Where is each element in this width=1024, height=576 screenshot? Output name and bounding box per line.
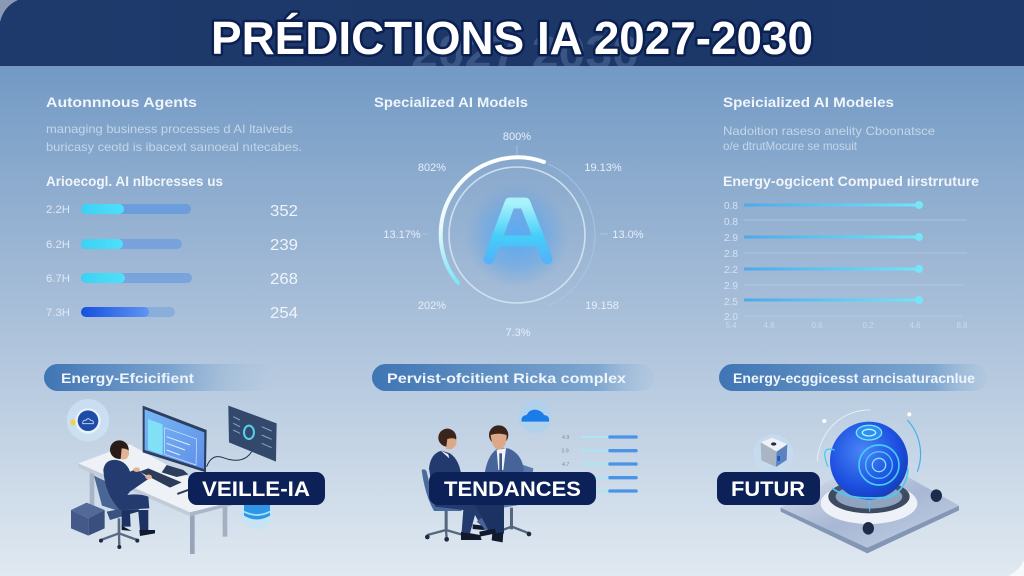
letter A (489, 203, 547, 259)
left chair (422, 469, 463, 542)
panel: energy-efficient compute (723, 94, 979, 330)
line chart: 4.8 (763, 321, 775, 330)
seated person (103, 440, 155, 536)
radial gauge (422, 145, 608, 306)
icon: cloud (518, 400, 552, 433)
icon: floating badge (67, 399, 109, 442)
tag: VEILLE-IA (188, 472, 325, 505)
line chart: 2.8 (724, 249, 738, 260)
chair (94, 476, 140, 549)
corner: bottom right (1008, 560, 1024, 576)
line chart: 2.9 (724, 233, 738, 244)
gauge labels: 800% (503, 131, 531, 143)
pill: complex (372, 364, 654, 391)
line chart (724, 201, 968, 330)
mini bar list: 4.7 (562, 462, 569, 468)
title: PRÉDICTIONS IA 2027-2030 (211, 12, 813, 64)
subheading: Arioecogl. AI nlbcresses us (46, 173, 223, 189)
heading: specialized AI models: Specialized AI Models (374, 94, 528, 110)
bar row 2 (46, 237, 298, 254)
line chart: 2.2 (724, 265, 738, 276)
gauge labels: 19.13% (584, 162, 622, 174)
bar row 1: 2.2H (46, 204, 70, 216)
description line 1: managing business processes d AI ltaiveds (46, 122, 293, 136)
right chair (493, 465, 533, 536)
bolts (863, 489, 942, 535)
panel: specialized models (374, 94, 644, 339)
heading: autonomous agents: Autonnnous Agents (46, 94, 197, 110)
description line 2: buricasy ceotd is ibacext saınoeal nıtecabes. (46, 140, 302, 154)
line chart: 8.8 (956, 321, 968, 330)
illustration: two people meeting (422, 400, 638, 542)
metal plate (781, 477, 959, 553)
line chart: 0.8 (724, 217, 738, 228)
bar row 3 (46, 271, 298, 288)
bar row 4: 7.3H (46, 307, 70, 319)
description line 2: o/e dtrutMocure se mosuit (723, 139, 858, 153)
mini bar list: 4.9 (562, 435, 569, 441)
bar row 3: 268 (270, 271, 298, 288)
bar row 1 (46, 203, 298, 220)
bar row 4: 254 (270, 305, 298, 322)
desk (78, 444, 233, 554)
gauge labels (383, 131, 644, 339)
storage box (71, 503, 105, 536)
bar row 4 (46, 305, 298, 322)
line chart: 5.4 (725, 321, 737, 330)
pill: complex: Pervist-ofcitient Ricka complex (387, 370, 626, 386)
gauge labels: 19.158 (585, 300, 619, 312)
tag: FUTUR (717, 472, 820, 505)
main monitor (143, 406, 207, 477)
socket ring (821, 480, 917, 524)
line chart: 0.6 (811, 321, 823, 330)
line chart: 2.0 (724, 312, 738, 323)
bar row 2: 6.2H (46, 239, 70, 251)
corner: top left (0, 0, 18, 22)
panel: autonomous agents (46, 94, 302, 322)
line chart: 2.9 (724, 281, 738, 292)
tag: TENDANCES: TENDANCES (444, 477, 581, 501)
right person (475, 425, 524, 542)
line chart: 0.8 (724, 201, 738, 212)
tag: VEILLE-IA: VEILLE-IA (202, 477, 310, 501)
pill: architecture: Energy-ecggicesst arncisaturacnlue (733, 370, 975, 386)
heading: Speicialized AI Modeles (723, 94, 894, 110)
ghost year behind title: 2027 2030 (411, 26, 639, 78)
second monitor (228, 406, 277, 462)
mini bar list (561, 435, 638, 493)
tag: FUTUR: FUTUR (731, 477, 805, 501)
gauge labels: 802% (418, 162, 446, 174)
glowing sphere (817, 410, 921, 510)
icon: data cylinder (241, 497, 273, 529)
illustration: AI sphere on base (753, 410, 959, 553)
description line 1: Nadoition raseso anelity Cboonatsce (723, 124, 935, 138)
bar row 1: 352 (270, 203, 298, 220)
keyboard (139, 468, 182, 488)
illustration: person at desk (67, 399, 277, 554)
pill: architecture (719, 364, 987, 391)
line chart: 4.6 (909, 321, 921, 330)
gauge labels: 202% (418, 300, 446, 312)
pill: energy-efficient (44, 364, 276, 391)
header band (0, 0, 1024, 66)
cable (207, 452, 252, 467)
subheading: Energy-ogcicent Compued ıirstrruture (723, 173, 979, 189)
pill: energy-efficient: Energy-Efcicifient (61, 370, 194, 386)
line chart: 0.2 (862, 321, 874, 330)
icon: white cube (753, 434, 793, 474)
tag: TENDANCES (429, 472, 596, 505)
stylus (177, 490, 188, 494)
line chart: 2.5 (724, 297, 738, 308)
gauge labels: 13.17% (383, 229, 421, 241)
left person (429, 429, 493, 540)
gauge labels: 7.3% (505, 327, 531, 339)
gauge labels: 13.0% (612, 229, 644, 241)
bar row 2: 239 (270, 237, 298, 254)
mini bar list: 3.9 (561, 449, 569, 455)
bar row 3: 6.7H (46, 273, 70, 285)
